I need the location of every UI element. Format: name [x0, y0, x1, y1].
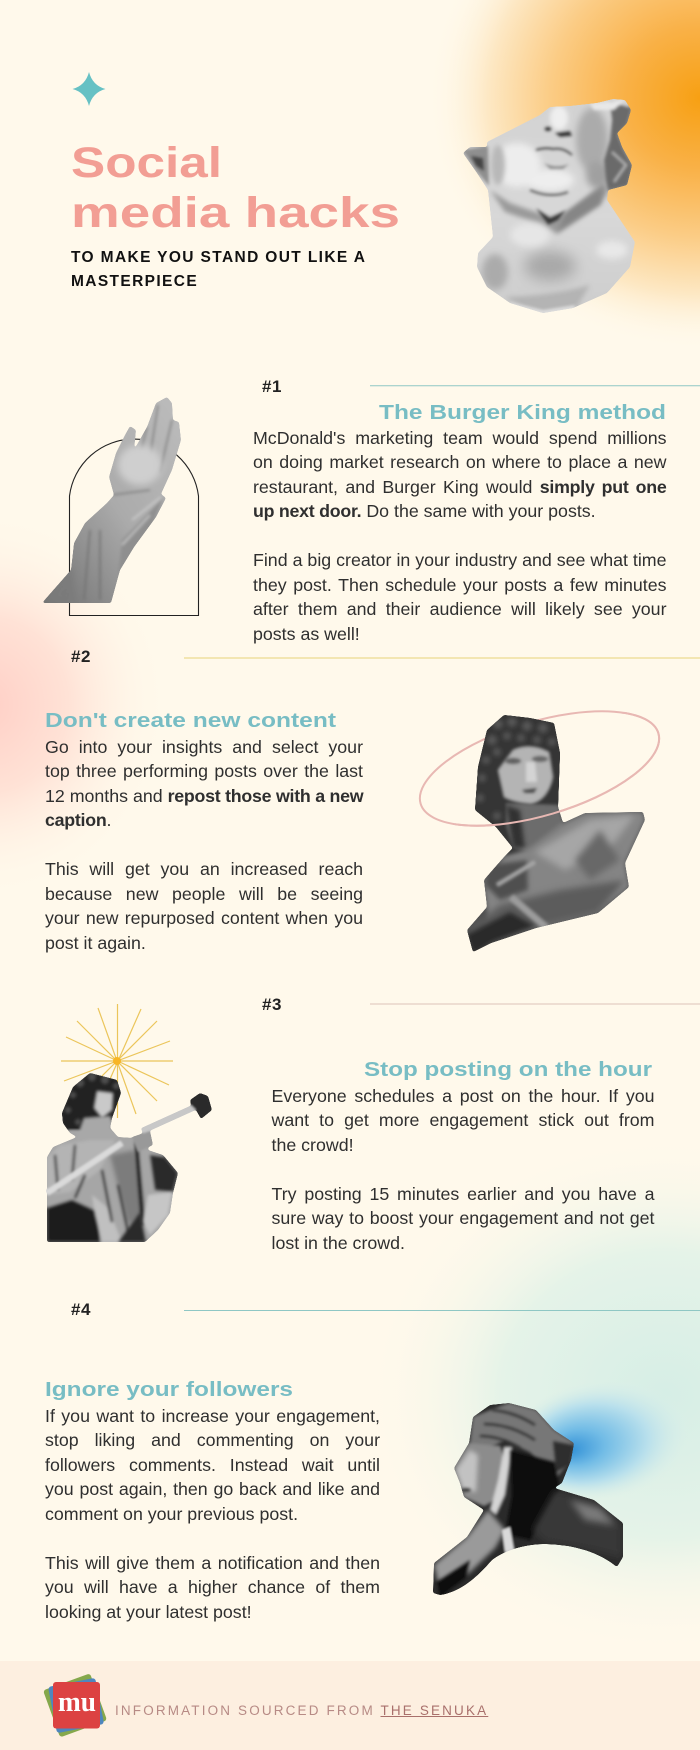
text block: ignore your followers	[45, 1406, 380, 1622]
statue: broken face	[464, 99, 635, 313]
heading: the burger king method: The Burger King method	[379, 402, 666, 424]
icon: four-point star	[72, 72, 106, 106]
text block: ignore your followers: If you want to increase your engagement,	[45, 1406, 380, 1426]
illustration: listening woman statue	[430, 1400, 625, 1600]
text block: ignore your followers: you post again, then go back and like and	[45, 1479, 380, 1499]
text block: don't create new content: your new repurposed content when you	[45, 908, 363, 928]
text block: stop posting on the hour: the crowd!	[272, 1135, 354, 1155]
footer source text: INFORMATION SOURCED FROM THE SENUKA	[115, 1703, 488, 1718]
heading: stop posting on the hour: Stop posting on the hour	[364, 1059, 652, 1081]
label: #3: #3	[262, 995, 282, 1014]
text block: burger king method: posts as well!	[253, 624, 360, 644]
subtitle	[71, 249, 366, 290]
text block: don't create new content: because new people will be seeing	[45, 884, 363, 904]
text block: burger king method: on doing market research on where to place a new	[253, 452, 666, 472]
text block: don't create new content: 12 months and repost those with a new	[45, 786, 363, 806]
text block: ignore your followers: you will have a higher chance of them	[45, 1577, 380, 1597]
text block: stop posting on the hour: want to get more engagement stick out from	[272, 1110, 654, 1130]
heading: ignore your followers: Ignore your followers	[45, 1379, 293, 1401]
subtitle: MASTERPIECE	[71, 272, 198, 290]
label: #2: #2	[71, 647, 91, 666]
section 3 divider	[370, 1003, 700, 1005]
text block: don't create new content	[45, 737, 364, 953]
subtitle: TO MAKE YOU STAND OUT LIKE A	[71, 249, 366, 266]
label: #1: #1	[262, 377, 282, 396]
text block: stop posting on the hour: lost in the crowd.	[272, 1233, 405, 1253]
text block: ignore your followers: looking at your latest post!	[45, 1602, 252, 1622]
heading: don't create new content: Don't create new content	[45, 710, 336, 732]
illustration: arch and hands	[40, 395, 198, 616]
text block: ignore your followers: stop liking and commenting on your	[45, 1430, 380, 1450]
text block: don't create new content: Go into your insights and select your	[45, 737, 363, 757]
title: Social	[71, 139, 222, 187]
text block: don't create new content: post it again.	[45, 933, 146, 953]
text block: stop posting on the hour	[272, 1086, 654, 1253]
logo: mu	[43, 1673, 107, 1737]
text block: stop posting on the hour: Try posting 15 minutes earlier and you have a	[272, 1184, 654, 1204]
section 4 divider	[184, 1310, 700, 1312]
text block: burger king method: McDonald's marketing team would spend millions	[253, 428, 666, 448]
title: media hacks	[71, 189, 400, 237]
text block: don't create new content: caption.	[45, 810, 111, 830]
text block: ignore your followers: followers comments. Instead wait until	[45, 1455, 380, 1475]
text block: burger king method: restaurant, and Burger King would simply put one	[253, 477, 666, 497]
text block: don't create new content: This will get you an increased reach	[45, 859, 363, 879]
text block: ignore your followers: This will give them a notification and then	[45, 1553, 380, 1573]
title	[71, 139, 400, 237]
text block: burger king method: Find a big creator in your industry and see what time	[253, 550, 666, 570]
text block: burger king method: they post. Then schedule your posts a few minutes	[253, 575, 666, 595]
section 1 divider	[370, 385, 700, 387]
footer band	[0, 1661, 700, 1750]
text block: don't create new content: top three performing posts over the last	[45, 761, 363, 781]
text block: burger king method: up next door. Do the same with your posts.	[253, 501, 596, 521]
text block: stop posting on the hour: sure way to boost your engagement and not get	[272, 1208, 654, 1228]
illustration: bust with halo	[418, 710, 660, 952]
text block: burger king method	[253, 428, 666, 644]
section 2 divider	[184, 657, 700, 659]
text block: burger king method: after them and their audience will likely see your	[253, 599, 666, 619]
text block: ignore your followers: comment on your previous post.	[45, 1504, 298, 1524]
label: #4: #4	[71, 1300, 91, 1319]
illustration: sunburst and statue with hammer	[45, 1004, 212, 1245]
text block: stop posting on the hour: Everyone schedules a post on the hour. If you	[272, 1086, 654, 1106]
logo: mu: mu	[58, 1686, 96, 1718]
